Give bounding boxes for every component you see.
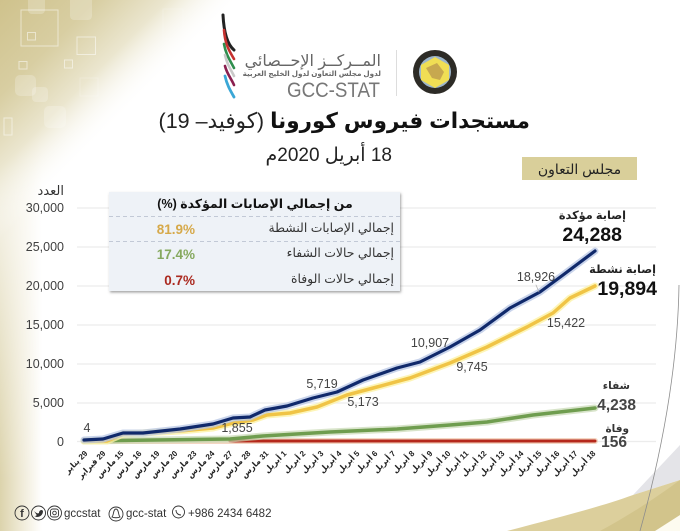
x axis date labels: 18 أبريل bbox=[568, 448, 598, 478]
line: active cases bbox=[84, 286, 595, 441]
badge: GCC label bbox=[522, 157, 637, 180]
x axis date labels: 31 مارس bbox=[239, 449, 272, 481]
panel: share of confirmed cases bbox=[109, 192, 400, 291]
callout: recovered: 4,238 bbox=[597, 397, 636, 414]
icon: GCC emblem bbox=[413, 50, 457, 94]
x axis date labels: 2 أبريل bbox=[281, 448, 308, 475]
icon: facebook bbox=[15, 506, 29, 520]
x axis date labels bbox=[62, 448, 598, 481]
icon: whatsapp bbox=[172, 506, 184, 518]
row: recovered: 17.4% bbox=[157, 247, 195, 262]
y axis title: العدد bbox=[38, 183, 64, 198]
line chart bbox=[84, 251, 595, 441]
x axis date labels: 4 أبريل bbox=[317, 448, 344, 475]
x axis date labels: 16 أبريل bbox=[532, 448, 562, 478]
y axis labels: 30,000 bbox=[26, 201, 64, 215]
callout: active: إصابة نشطة bbox=[589, 264, 656, 276]
x axis date labels: 29 يناير bbox=[62, 449, 90, 476]
callout: deaths bbox=[601, 423, 629, 451]
icon: twitter bbox=[32, 506, 46, 520]
title: مستجدات فيروس كورونا (كوفيد– 19) bbox=[159, 109, 530, 133]
y axis labels bbox=[26, 201, 64, 449]
x axis date labels: 9 أبريل bbox=[408, 448, 435, 475]
callout: recovered: شفاء bbox=[603, 380, 630, 392]
row: deaths bbox=[164, 272, 394, 288]
footer handle snapchat: gcc-stat bbox=[126, 508, 167, 520]
x axis date labels: 10 أبريل bbox=[423, 448, 453, 478]
x axis date labels: 8 أبريل bbox=[390, 448, 417, 475]
x axis date labels: 1 أبريل bbox=[262, 448, 289, 475]
x axis date labels: 17 أبريل bbox=[550, 448, 580, 478]
callout: confirmed: 24,288 bbox=[562, 224, 622, 246]
x axis date labels: 29 فبراير bbox=[75, 449, 108, 481]
x axis date labels: 5 أبريل bbox=[335, 448, 362, 475]
data labels: 15,422 bbox=[547, 316, 585, 330]
x axis date labels: 13 أبريل bbox=[477, 448, 507, 478]
x axis date labels: 20 مارس bbox=[148, 449, 181, 481]
x axis date labels: 7 أبريل bbox=[371, 448, 398, 475]
row: deaths: 0.7% bbox=[164, 273, 195, 288]
callout: recovered bbox=[597, 380, 636, 414]
x axis date labels: 19 مارس bbox=[130, 449, 163, 481]
x axis date labels: 23 مارس bbox=[167, 449, 200, 481]
callout: deaths: 156 bbox=[601, 434, 627, 451]
logo arabic name: المــركــز الإحــصائي bbox=[245, 53, 381, 71]
x axis date labels: 6 أبريل bbox=[353, 448, 380, 475]
x axis date labels: 12 أبريل bbox=[459, 448, 489, 478]
row: recovered: إجمالي حالات الشفاء bbox=[287, 246, 394, 260]
badge: GCC label: مجلس التعاون bbox=[538, 161, 621, 178]
row: deaths: إجمالي حالات الوفاة bbox=[291, 272, 394, 287]
logo: GCC-STAT bbox=[223, 15, 457, 102]
y axis labels: 25,000 bbox=[26, 240, 64, 254]
y axis labels: 0 bbox=[57, 435, 64, 449]
panel heading: من إجمالي الإصابات المؤكدة (%) bbox=[157, 197, 353, 211]
x axis date labels: 24 مارس bbox=[185, 449, 218, 481]
callout: confirmed bbox=[559, 210, 626, 246]
data labels: 5,173 bbox=[347, 395, 379, 409]
data labels: 5,719 bbox=[306, 377, 338, 391]
data labels: 18,926 bbox=[517, 270, 555, 284]
x axis date labels: 15 أبريل bbox=[514, 448, 544, 478]
row: active: 81.9% bbox=[157, 222, 195, 237]
line: deaths bbox=[84, 438, 595, 444]
row: recovered bbox=[157, 246, 394, 262]
x axis date labels: 14 أبريل bbox=[496, 448, 526, 478]
y axis labels: 10,000 bbox=[26, 357, 64, 371]
data labels: 9,745 bbox=[456, 360, 488, 374]
footer handle: gccstat bbox=[64, 508, 101, 520]
y axis labels: 20,000 bbox=[26, 279, 64, 293]
y axis labels: 15,000 bbox=[26, 318, 64, 332]
icon: ribbon strands bbox=[223, 15, 234, 97]
x axis date labels: 27 مارس bbox=[203, 449, 236, 481]
row: active: إجمالي الإصابات النشطة bbox=[268, 221, 394, 235]
data labels bbox=[84, 270, 585, 435]
callout: active bbox=[589, 264, 657, 300]
x axis date labels: 15 مارس bbox=[94, 449, 127, 481]
x axis date labels: 3 أبريل bbox=[299, 448, 326, 475]
logo latin name: GCC-STAT bbox=[287, 79, 380, 102]
line: confirmed cases bbox=[84, 251, 595, 440]
icon: facebook: f bbox=[20, 508, 24, 520]
data labels: 10,907 bbox=[411, 336, 449, 350]
footer phone: +986 2434 6482 bbox=[188, 508, 271, 520]
callout: deaths: وفاة bbox=[605, 423, 629, 435]
date subtitle: 18 أبريل 2020م bbox=[266, 142, 392, 166]
line: recovered bbox=[84, 408, 595, 441]
logo subtitle: لدول مجلس التعاون لدول الخليج العربية bbox=[243, 69, 381, 78]
social media footer bbox=[15, 506, 271, 521]
callout: active: 19,894 bbox=[597, 278, 657, 300]
data labels: 1,855 bbox=[221, 421, 253, 435]
x axis date labels: 28 مارس bbox=[221, 449, 254, 481]
icon: instagram bbox=[48, 506, 62, 520]
callout: confirmed: إصابة مؤكدة bbox=[559, 210, 626, 222]
icon: snapchat bbox=[109, 507, 123, 521]
x axis date labels: 11 أبريل bbox=[441, 448, 471, 478]
x axis date labels: 16 مارس bbox=[112, 449, 145, 481]
data labels: 4 bbox=[84, 421, 91, 435]
row: active bbox=[157, 221, 394, 237]
y axis labels: 5,000 bbox=[33, 396, 64, 410]
